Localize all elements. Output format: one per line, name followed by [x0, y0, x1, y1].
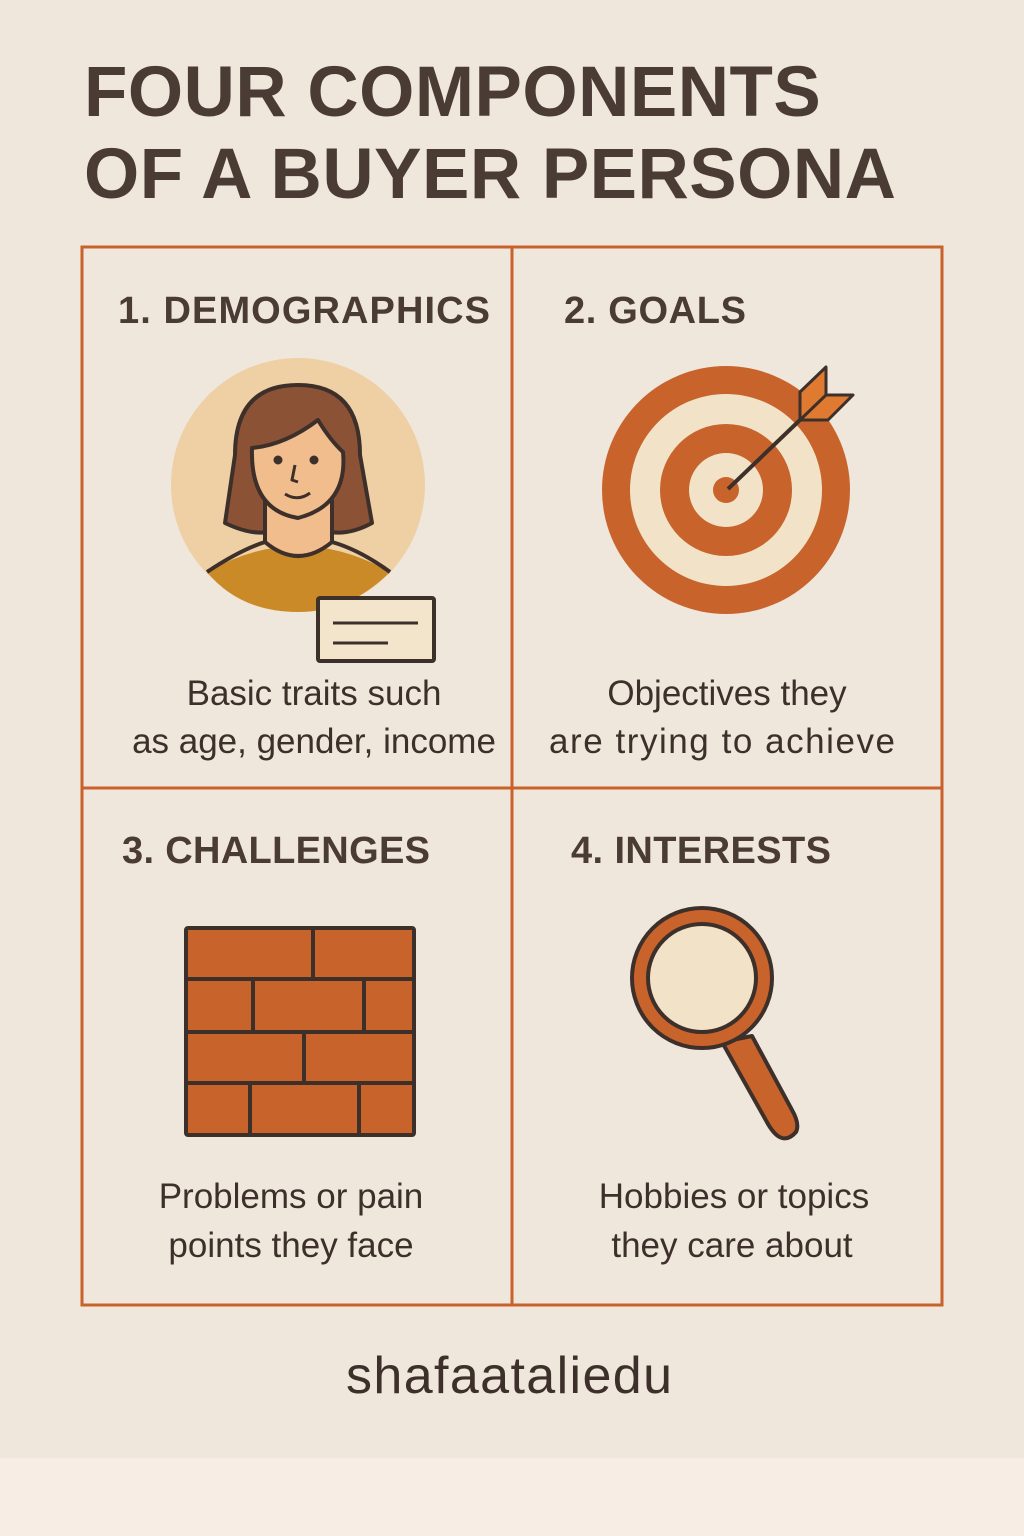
icon: brick wall: [186, 928, 414, 1135]
panel: interests: [571, 830, 869, 1265]
panel: interests: they care about: [611, 1226, 853, 1265]
panel: demographics: [118, 290, 496, 761]
grid frame: [82, 247, 942, 1305]
footer credit: shafaataliedu: [346, 1347, 672, 1405]
heading: demographics: 1. DEMOGRAPHICS: [118, 290, 490, 332]
icon: person avatar: [171, 358, 434, 661]
heading: challenges: 3. CHALLENGES: [122, 830, 430, 872]
title: OF A BUYER PERSONA: [84, 135, 896, 214]
panel: goals: [549, 290, 895, 761]
description: goals: Objectives they: [607, 674, 847, 713]
panel: goals: are trying to achieve: [549, 722, 895, 761]
heading: interests: 4. INTERESTS: [571, 830, 831, 872]
icon: target with arrow: [602, 366, 853, 614]
description: challenges: Problems or pain: [159, 1177, 423, 1216]
panel: demographics: as age, gender, income: [132, 722, 496, 761]
heading: goals: 2. GOALS: [564, 290, 746, 332]
description: demographics: Basic traits such: [187, 674, 441, 713]
panel: challenges: points they face: [168, 1226, 414, 1265]
title: [84, 53, 896, 214]
title: FOUR COMPONENTS: [84, 53, 821, 132]
icon: magnifying glass: [632, 908, 797, 1138]
description: interests: Hobbies or topics: [599, 1177, 869, 1216]
panel: challenges: [122, 830, 430, 1265]
